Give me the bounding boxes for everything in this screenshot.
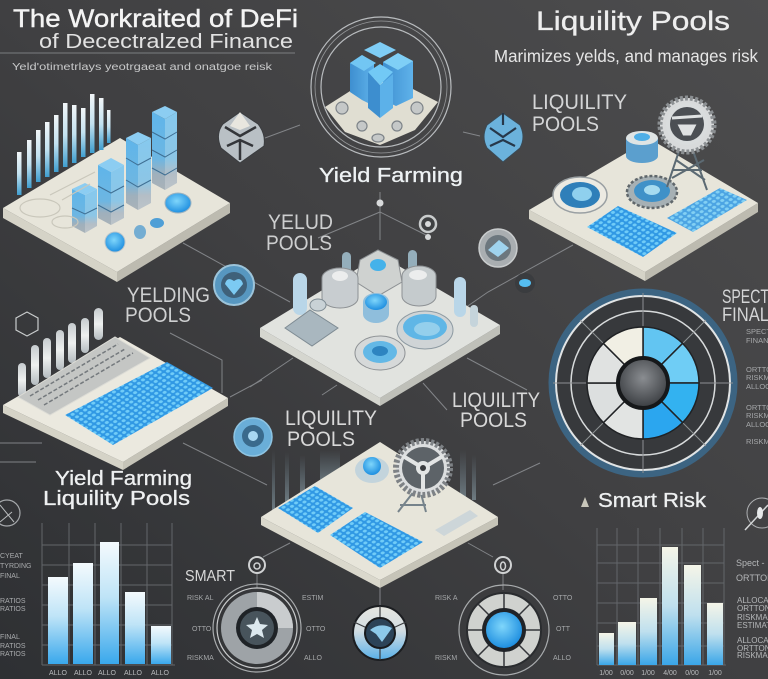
label: yelud pools: POOLS [266, 232, 332, 255]
text block: left notes: FINAL [0, 634, 20, 641]
text block: right wheel notes [746, 327, 768, 446]
panel: bottom center platform [261, 441, 498, 588]
text block: dial side notes: OTTO [553, 595, 573, 602]
text block: right notes: Spect - [736, 558, 765, 568]
subheading right: Marimizes yelds, and manages risk [494, 46, 758, 66]
blue field [65, 362, 213, 445]
label: liquility pools center-right: POOLS [460, 409, 527, 432]
bar chart: bottom right: 0/00 [620, 670, 634, 677]
bar chart: bottom right [597, 528, 726, 677]
label: liquidity pools top right: LIQUILITY [532, 91, 627, 114]
label: yelud pools: YELUD [268, 211, 333, 234]
icon: star dial [213, 584, 301, 672]
icon: blue orb dial [459, 585, 549, 675]
ornaments [336, 102, 423, 142]
text block: left notes: RATIOS [0, 643, 26, 650]
segments [587, 327, 699, 439]
text block: dial side notes: RISK A [435, 595, 458, 602]
icon: shield left [218, 112, 264, 163]
connector lines [0, 53, 573, 606]
outer rings [552, 292, 734, 474]
text block: left notes [0, 553, 32, 658]
text block: dial side notes: OTTO [306, 626, 326, 633]
text block: right notes [736, 558, 768, 660]
title: of Decectralzed Finance [39, 31, 293, 53]
bar chart: bottom right: 4/00 [663, 670, 677, 677]
bar chart: bottom right: 0/00 [685, 670, 699, 677]
text block: dial side notes: OTTO [192, 626, 212, 633]
platform [3, 138, 230, 282]
gear tower [660, 98, 714, 190]
bar chart: bottom left [42, 523, 175, 677]
text block: left notes: FINAL [0, 573, 20, 580]
platform [261, 442, 498, 588]
orb and stand [355, 457, 426, 512]
label: yelding pools [125, 284, 210, 327]
spires [293, 250, 478, 327]
icon: left heart badge [214, 265, 254, 305]
text block: left notes: RATIOS [0, 651, 26, 658]
text block: left notes: CYEAT [0, 553, 24, 560]
text block: dial side notes: ESTIM [302, 595, 324, 602]
bar chart: bottom left: ALLO [98, 670, 117, 677]
label: yelding pools: POOLS [125, 304, 191, 327]
label: liquidity pools top right: POOLS [532, 113, 599, 136]
text block: dial side notes: RISKM [435, 655, 457, 662]
text block: left notes: TYRDING [0, 563, 32, 570]
text block: dial side notes: RISKMA [187, 655, 214, 662]
bar chart: bottom left: ALLO [151, 670, 170, 677]
label: liquility pools center-left [285, 407, 377, 451]
icon: far-left small tag [16, 312, 38, 336]
faint markings [20, 172, 95, 228]
title: The Workraited of DeFi [13, 5, 298, 33]
pool rings [553, 176, 677, 213]
bar chart: bottom right: 1/00 [599, 670, 613, 677]
buildings and pools [285, 250, 453, 370]
label: yelding pools: YELDING [127, 284, 210, 307]
white spikes [18, 308, 103, 397]
bar chart: bottom right: 1/00 [708, 670, 722, 677]
decoration streaks behind bottom platform [272, 450, 476, 510]
icon: right dial sketch [745, 498, 768, 530]
platform [325, 72, 438, 145]
panel: mid-left platform [3, 308, 228, 470]
text strip panel [18, 337, 150, 415]
blue fields [587, 188, 747, 257]
label: yield farming: Yield Farming [319, 165, 463, 187]
label: liquility pools center-right [452, 389, 540, 432]
panel: center platform [260, 250, 500, 406]
icon: drop above left dial [249, 557, 265, 573]
icon: small blue node [515, 273, 535, 293]
label: liquility pools center-left: LIQUILITY [285, 407, 377, 430]
icon: drop above right dial [495, 557, 511, 573]
text block: dial side notes: ALLO [553, 655, 571, 662]
text block: dial side notes [187, 595, 573, 662]
label: liquility pools center-right: LIQUILITY [452, 389, 540, 412]
icon: top ring node [376, 200, 436, 240]
label: spect final [722, 287, 768, 326]
platform [529, 139, 758, 281]
heading right: Liquility Pools [536, 6, 730, 36]
title [13, 5, 298, 53]
faint print [435, 510, 478, 536]
label: smart risk: Smart Risk [598, 490, 707, 512]
label: yield farming liquidity pools: Liquility Pools [43, 488, 190, 510]
panel: risk wheel [552, 292, 734, 474]
bar chart: bottom left: ALLO [49, 670, 68, 677]
blue fields [278, 486, 423, 568]
discs [105, 193, 191, 252]
label: yield farming liquidity pools: Yield Farming [55, 468, 192, 490]
icon: blue badge [234, 418, 272, 456]
icon: smart risk bullet [581, 497, 589, 507]
text block: left notes: RATIOS [0, 598, 26, 605]
text block: dial side notes: ALLO [304, 655, 322, 662]
platform [260, 255, 500, 406]
icon: far-left round badge [0, 500, 20, 526]
text block: left notes: RATIOS [0, 606, 26, 613]
icon: right circle badge [479, 229, 517, 267]
icon: shield right [484, 113, 523, 162]
panel: yield farming top center [311, 17, 451, 157]
subtitle left: Yeld'otimetrlays yeotrgaeat and onatgoe reisk [12, 62, 273, 73]
gear [396, 441, 450, 495]
text block: dial side notes: OTT [556, 626, 571, 633]
ring [311, 17, 451, 157]
label: liquility pools center-left: POOLS [287, 428, 355, 451]
label: smart: SMART [185, 568, 235, 585]
panel: top-left platform with bars [3, 94, 230, 282]
bar chart: bottom left: ALLO [124, 670, 143, 677]
bar chart: bottom left: ALLO [74, 670, 93, 677]
hub [618, 358, 668, 408]
icon: center dial [353, 606, 407, 660]
label: yelud pools [266, 211, 333, 255]
platform [3, 337, 228, 470]
spikes [17, 94, 110, 195]
stacks [72, 106, 177, 233]
cylinder [626, 131, 658, 163]
text block: dial side notes: RISK AL [187, 595, 214, 602]
label: yield farming liquidity pools [43, 468, 192, 510]
towers [350, 42, 413, 118]
panel: top-right platform liquidity pools [529, 98, 758, 281]
label: liquidity pools top right [532, 91, 627, 136]
bar chart: bottom right: 1/00 [641, 670, 655, 677]
